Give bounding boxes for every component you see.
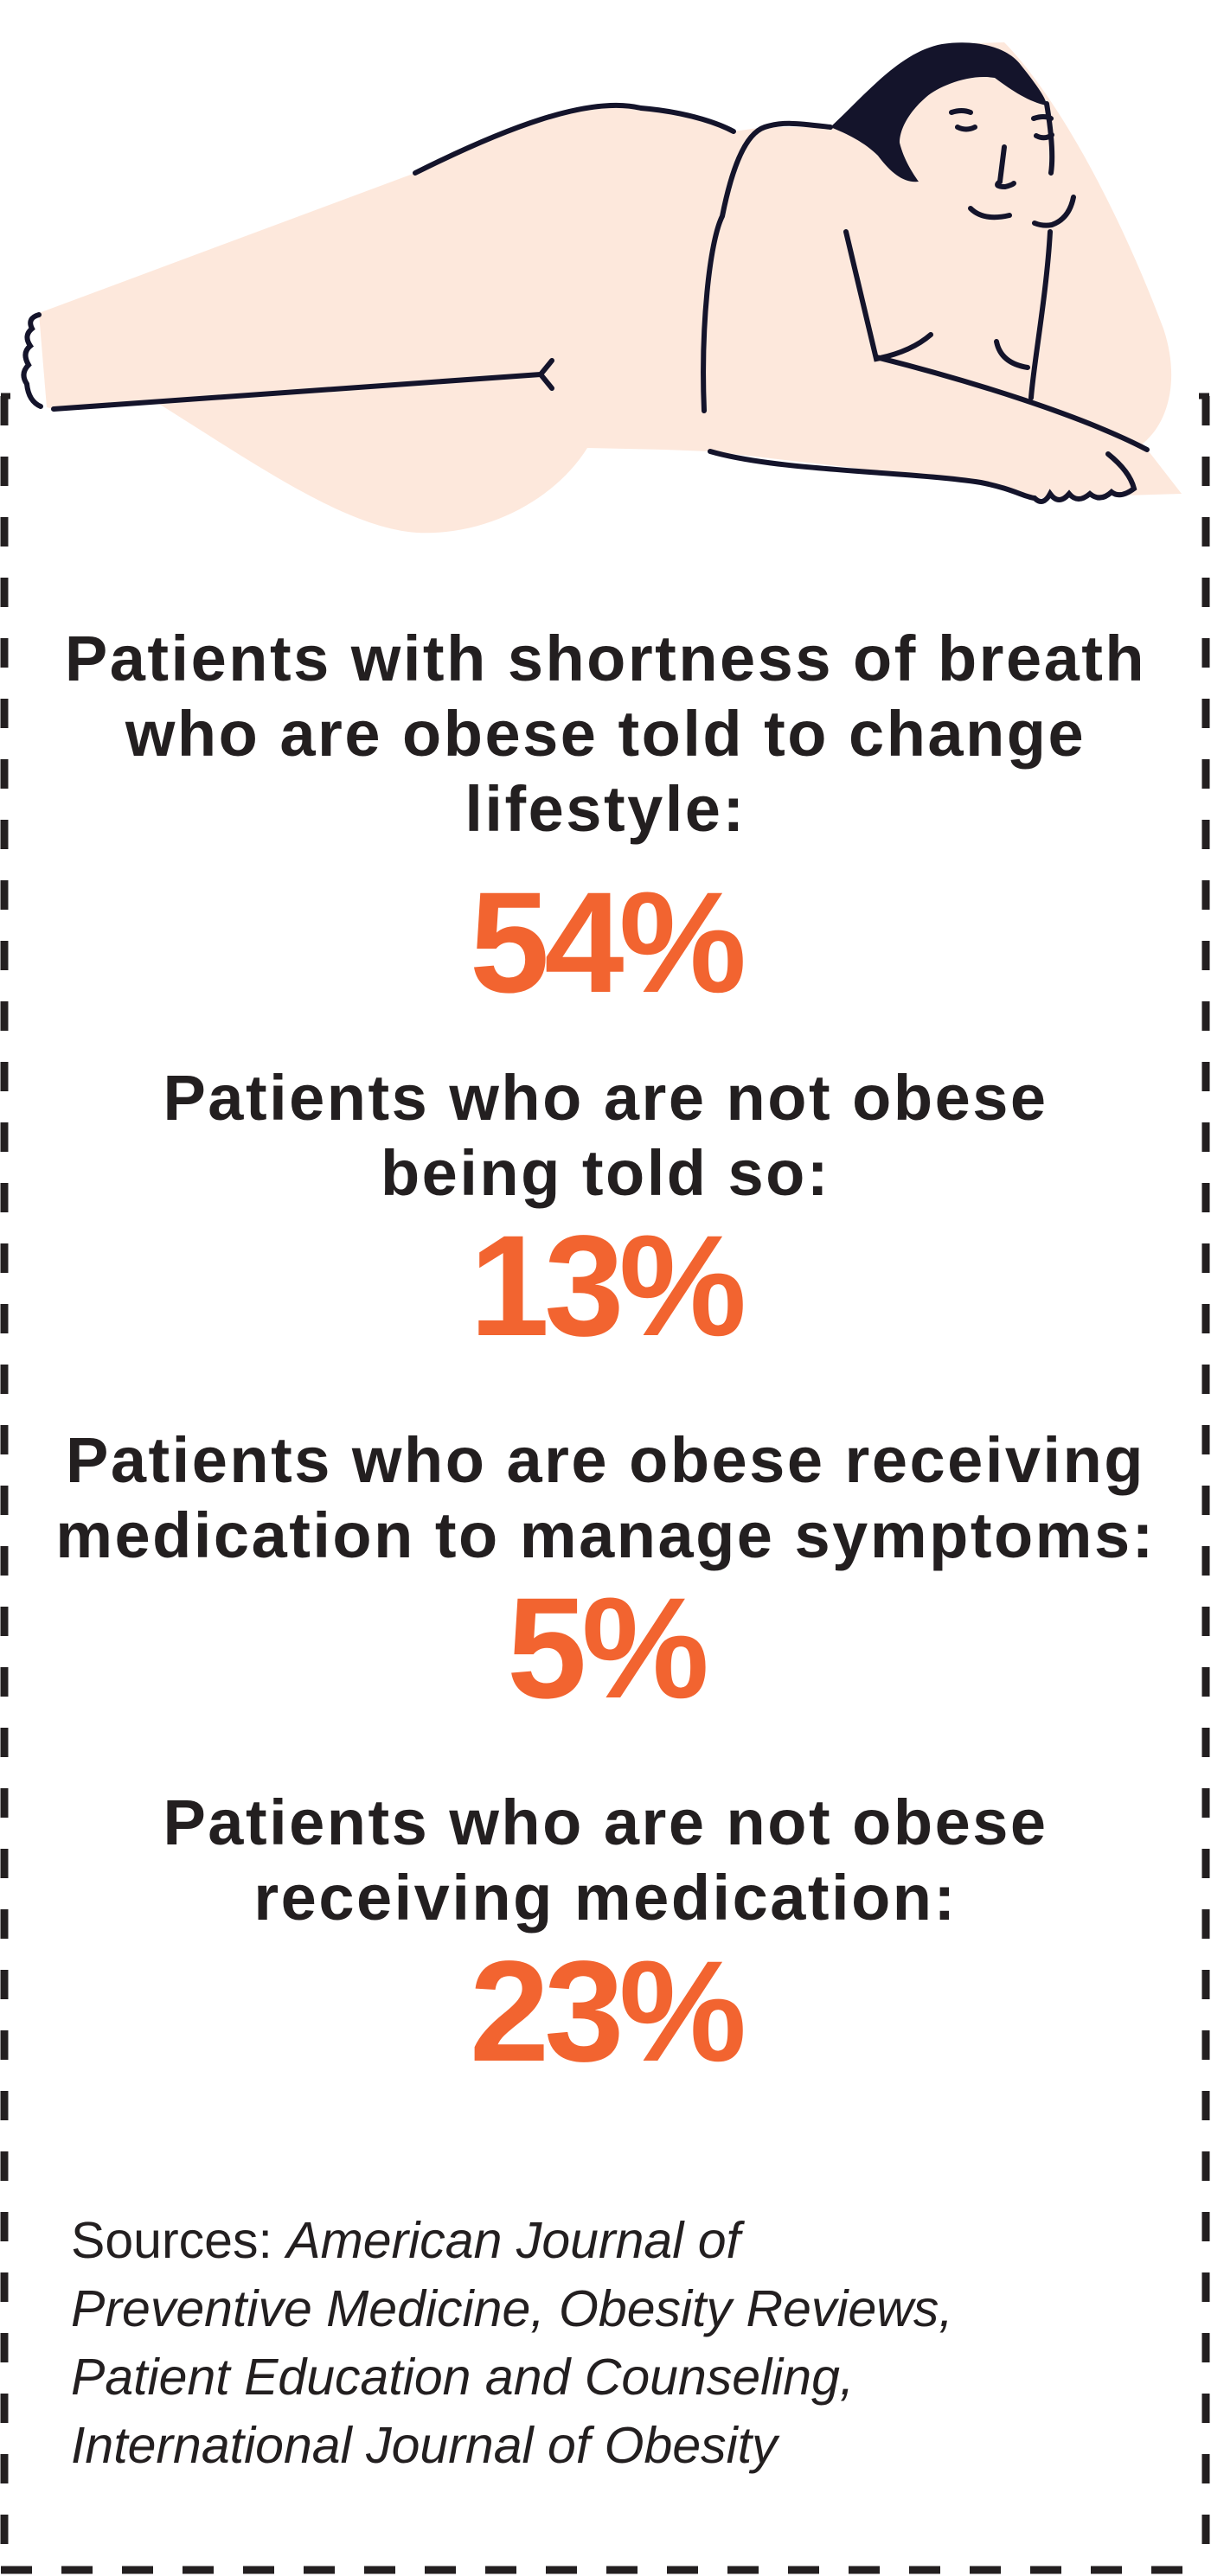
heading: block 3 bbox=[55, 1424, 1156, 1571]
heading: block 2: being told so: bbox=[381, 1137, 830, 1209]
stat: 13%: 13% bbox=[470, 1206, 741, 1366]
illustration: reclining woman bbox=[21, 42, 1182, 533]
sources text: Sources: American Journal of bbox=[71, 2212, 740, 2269]
stat: 5%: 5% bbox=[507, 1569, 704, 1729]
heading: block 1: lifestyle: bbox=[465, 773, 746, 845]
heading: block 1: Patients with shortness of breath bbox=[65, 623, 1146, 694]
sources text: Patient Education and Counseling, bbox=[71, 2349, 854, 2406]
heading: block 3: Patients who are obese receiving bbox=[66, 1424, 1145, 1496]
stat: 54%: 54% bbox=[470, 863, 741, 1023]
heading: block 4: receiving medication: bbox=[253, 1862, 958, 1934]
heading: block 2: Patients who are not obese bbox=[163, 1062, 1048, 1134]
stat: 23%: 23% bbox=[470, 1932, 741, 2092]
heading: block 1 bbox=[65, 623, 1146, 845]
heading: block 4: Patients who are not obese bbox=[163, 1787, 1048, 1858]
sources text: International Journal of Obesity bbox=[71, 2417, 778, 2474]
heading: block 4 bbox=[163, 1787, 1048, 1934]
heading: block 3: medication to manage symptoms: bbox=[55, 1499, 1156, 1571]
heading: block 1: who are obese told to change bbox=[125, 698, 1086, 770]
sources text: Preventive Medicine, Obesity Reviews, bbox=[71, 2280, 953, 2337]
heading: block 2 bbox=[163, 1062, 1048, 1209]
sources text bbox=[71, 2212, 953, 2474]
